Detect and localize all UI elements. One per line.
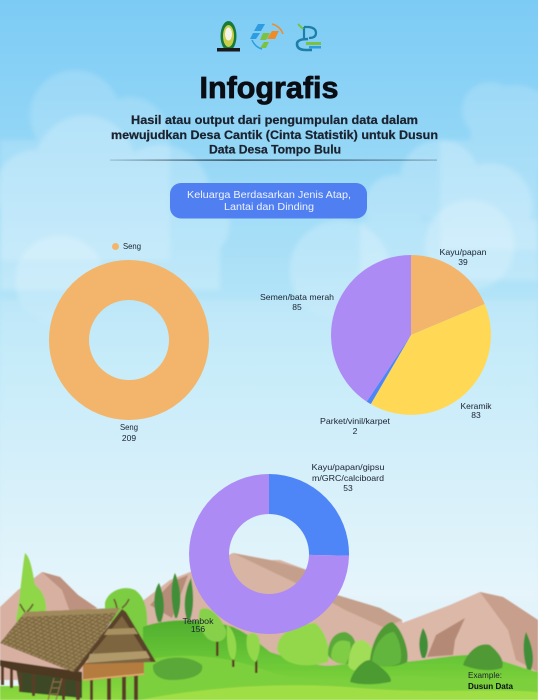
cypress trees	[154, 573, 533, 672]
legend: Seng: Seng	[123, 241, 141, 251]
logo: BPS	[250, 24, 283, 49]
chart: dinding donut: Tembok	[182, 616, 214, 626]
under-house shade	[16, 668, 82, 698]
right mountain	[397, 592, 538, 680]
chart: atap donut: 209	[122, 433, 136, 443]
chart: dinding donut: 156	[191, 624, 205, 634]
logo: Desa Cantik	[297, 24, 321, 50]
chart: atap donut	[69, 241, 189, 443]
main roof	[0, 608, 120, 672]
chart: lantai pie: 83	[471, 410, 481, 420]
subtitle: mewujudkan Desa Cantik (Cinta Statistik) untuk Dusun	[111, 128, 438, 142]
light grass band	[120, 656, 538, 700]
roof horns	[20, 599, 129, 612]
chart: lantai pie: 39	[458, 257, 468, 267]
middle mountain	[140, 553, 410, 680]
chart: lantai pie: Kayu/papan	[440, 247, 487, 257]
gable	[86, 610, 155, 664]
subtitle: Hasil atau output dari pengumpulan data dalam	[131, 113, 418, 127]
footer note	[468, 670, 513, 691]
subtitle: Data Desa Tompo Bulu	[209, 142, 341, 156]
chart: atap donut: Seng	[120, 422, 138, 432]
small trees	[199, 608, 260, 673]
chart: lantai pie: Parket/vinil/karpet	[320, 416, 391, 426]
background clouds	[0, 70, 538, 600]
title: Infografis	[200, 70, 338, 105]
chart: lantai pie: Semen/bata merah	[260, 292, 334, 302]
thatched stilt house	[0, 599, 156, 700]
chart: lantai pie: 2	[353, 426, 358, 436]
lower deck	[0, 660, 82, 682]
section button: Lantai dan Dinding	[224, 202, 314, 213]
stilts	[1, 665, 138, 700]
chart: lantai pie: 85	[292, 302, 302, 312]
logo: regency crest	[217, 21, 240, 52]
legend: Seng	[112, 241, 141, 251]
section button	[170, 183, 367, 218]
chart: dinding donut: Kayu/papan/gipsu	[312, 462, 385, 472]
green ground hills	[0, 620, 538, 700]
subtitle	[111, 113, 438, 156]
wooden wall	[83, 659, 144, 681]
chart: dinding donut: m/GRC/calciboard	[312, 473, 384, 483]
logos row	[217, 21, 321, 52]
chart: dinding donut	[182, 462, 385, 634]
chart: lantai pie	[260, 247, 492, 436]
foreground grass	[140, 685, 538, 700]
footer note: Dusun Data	[468, 681, 513, 691]
chart: lantai pie: Keramik	[460, 401, 492, 411]
footer note: Example:	[468, 670, 502, 680]
chart: dinding donut: 53	[343, 483, 353, 493]
section button: Keluarga Berdasarkan Jenis Atap,	[187, 190, 351, 201]
foreground bushes	[153, 622, 503, 684]
ladder	[48, 678, 62, 700]
tree behind roof	[105, 588, 147, 650]
left mountain	[0, 572, 100, 680]
landscape scene	[0, 553, 538, 700]
left tree behind house	[16, 553, 46, 630]
